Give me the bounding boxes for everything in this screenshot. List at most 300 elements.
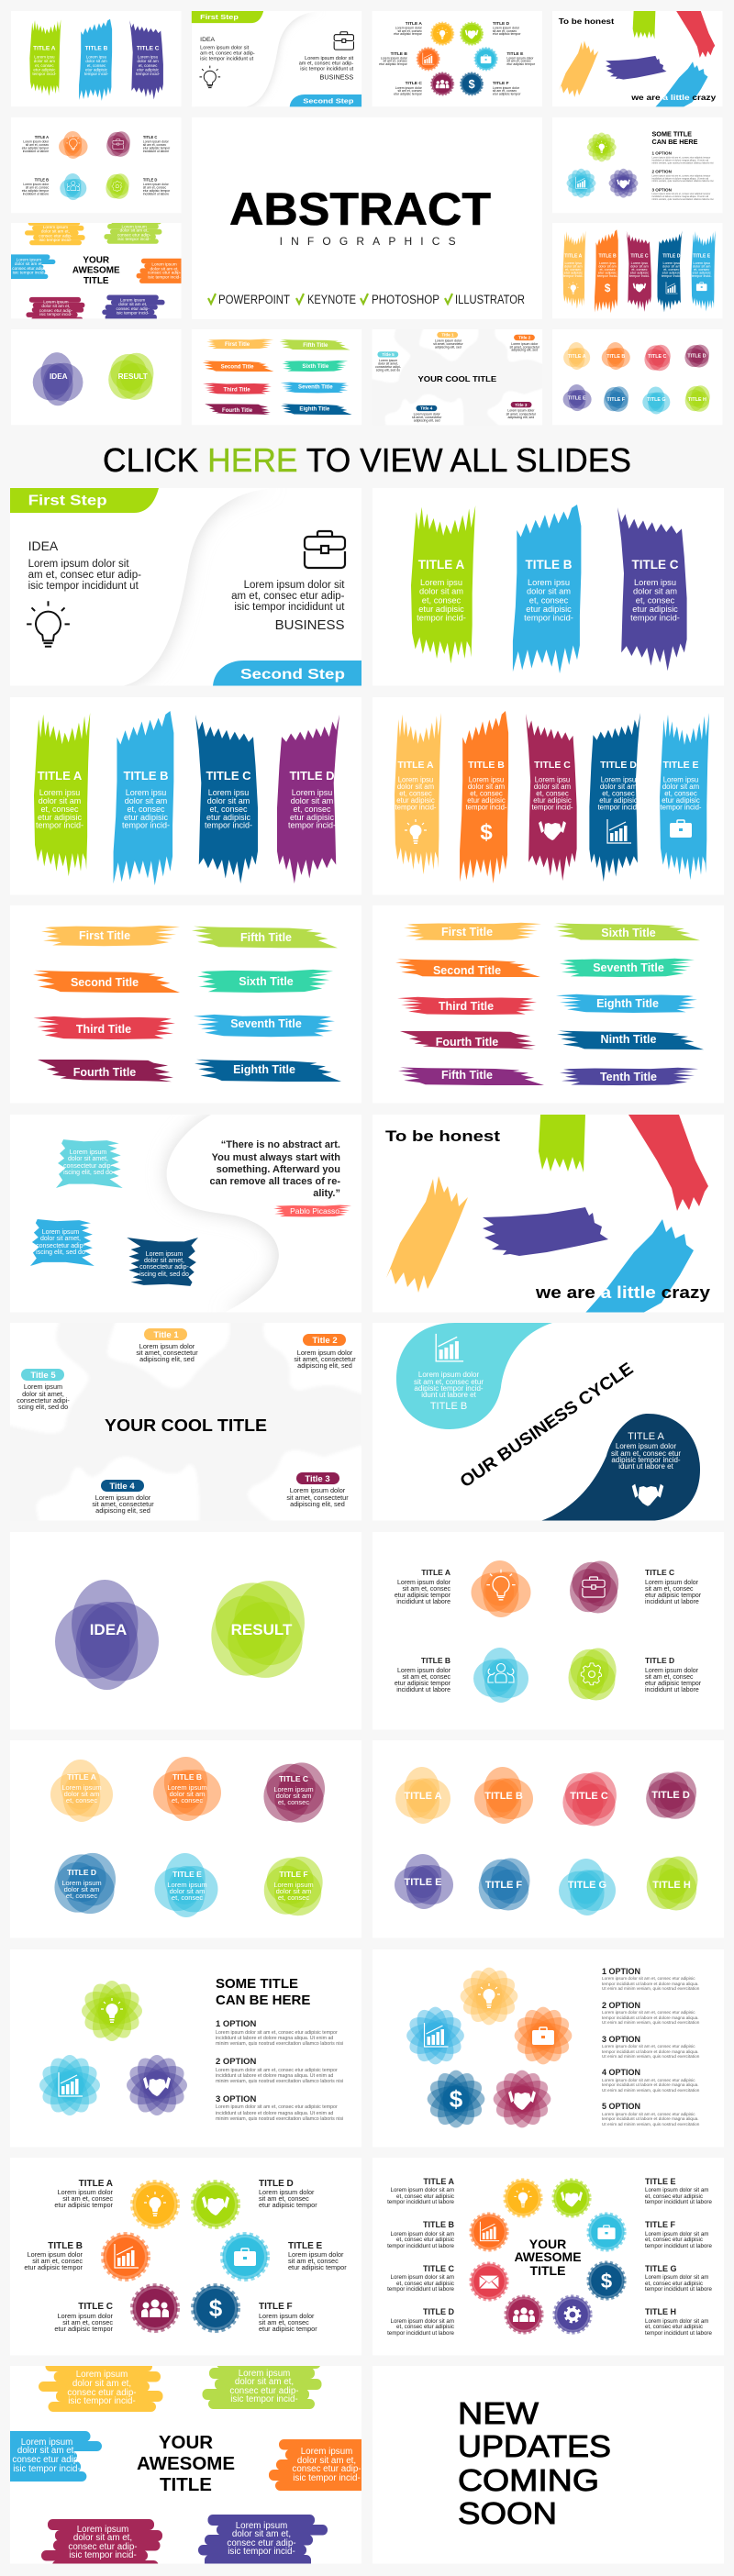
blob B: Lorem ipsum	[167, 1783, 207, 1792]
third title: Third Title	[76, 1023, 131, 1036]
yellow brush	[386, 1176, 468, 1293]
software checklist: PHOTOSHOP	[372, 293, 439, 306]
brush C: et, consec	[209, 805, 248, 814]
brush E: et, consec	[664, 789, 697, 797]
brush A: etur adipisic	[396, 796, 435, 805]
title 5: dolor sit amet,	[22, 1390, 64, 1398]
thumbnail: some title	[552, 117, 722, 213]
panel: four vertical brushes	[34, 711, 339, 885]
badge F	[193, 2285, 317, 2333]
title 1: sit amet, consectetur	[136, 1349, 198, 1357]
brush C: tempor incid-	[531, 803, 573, 811]
green note: consec etur adip-	[229, 2386, 299, 2396]
blob B: et, consec	[172, 1796, 203, 1804]
thumbnail: awesome title	[6, 219, 185, 322]
yellow flower	[458, 1965, 520, 2027]
brush C: tempor incid-	[205, 820, 252, 829]
quote: can remove all traces of re-	[210, 1176, 340, 1187]
brush A: etur adipisic	[38, 813, 83, 822]
badge F: $	[209, 2294, 223, 2322]
first title	[41, 926, 180, 946]
icon: briefcase	[305, 531, 345, 568]
brush A: dolor sit am	[397, 783, 434, 791]
brush C	[195, 715, 258, 883]
brush A: et, consec	[40, 805, 79, 814]
cyan brush note: Lorem ipsum	[70, 1149, 106, 1156]
right labels: Lorem ipsum dolor sit am	[645, 2274, 708, 2281]
cyan drop	[396, 1323, 552, 1429]
brush B: TITLE B	[525, 558, 573, 572]
seventh title	[560, 959, 695, 977]
blob D: Lorem ipsum dolor	[645, 1668, 699, 1674]
first step tab: First Step	[28, 494, 107, 508]
blob C: sit am et, consec	[645, 1586, 694, 1593]
fourth title	[400, 1031, 536, 1049]
badge B	[24, 2234, 149, 2280]
brush C: tempor incid-	[630, 613, 680, 622]
right labels: tempor incididunt ut labore	[645, 2199, 712, 2205]
blob E: TITLE E	[172, 1870, 202, 1879]
brush B: tempor incid-	[122, 820, 170, 829]
second step tab: Second Step	[240, 667, 345, 683]
option 3: Lorem ipsum dolor sit am et, consec etur adipisic tempor	[216, 2104, 338, 2110]
title 2	[294, 1334, 356, 1370]
brush E: etur adipisic	[662, 796, 700, 805]
orange note: consec etur adip-	[292, 2464, 361, 2474]
option 4: Lorem ipsum dolor sit am et, consec etur adipisic	[602, 2078, 695, 2082]
blob C: TITLE C	[645, 1568, 674, 1577]
green brush	[539, 1115, 585, 1172]
eighth title	[556, 994, 697, 1013]
thumbnail: eight titles	[192, 329, 361, 425]
red brush	[628, 1115, 708, 1211]
title 3: sit amet, consectetur	[286, 1493, 349, 1502]
blob B: dolor sit am	[170, 1790, 205, 1798]
panel: eight blobs	[373, 1740, 724, 1938]
dark drop: TITLE A	[628, 1431, 665, 1442]
blue brush note	[30, 1219, 95, 1266]
blob B: TITLE B	[172, 1772, 202, 1782]
right labels: tempor incididunt ut labore	[645, 2330, 712, 2337]
panel: six scalloped badges	[10, 2158, 361, 2356]
blob D: TITLE D	[67, 1868, 96, 1877]
brush C: etur adipisic	[206, 813, 251, 822]
maroon note: Lorem ipsum	[77, 2525, 128, 2535]
option 3: minim veniam, quis nostrud exercitation ullamco laboris nisi	[216, 2116, 343, 2122]
title 2: adipiscing elit, sed	[297, 1361, 352, 1370]
option 1: minim veniam, quis nostrud exercitation ullamco laboris nisi	[216, 2041, 343, 2047]
blob F	[264, 1857, 323, 1915]
blob B	[474, 1767, 533, 1824]
sixth title	[553, 923, 700, 940]
option 2: Lorem ipsum dolor sit am et, consec etur adipisic tempor	[216, 2068, 338, 2073]
right labels: et, consec etur adipisic	[645, 2193, 703, 2200]
badge E: etur adipisic tempor	[288, 2263, 347, 2271]
option 1: Lorem ipsum dolor sit am et, consec etur adipisic tempor	[216, 2030, 338, 2036]
panel: our business cycle	[373, 1323, 724, 1521]
blob B: etur adipisic tempor	[395, 1681, 451, 1687]
icon: light bulb	[27, 601, 70, 647]
fifth title	[192, 927, 338, 948]
brush C	[617, 507, 687, 671]
title 5: Lorem ipsum	[24, 1382, 62, 1391]
blob A: Lorem ipsum dolor	[397, 1580, 451, 1586]
brush A: tempor incid-	[36, 820, 83, 829]
cyan brush note	[56, 1139, 123, 1188]
left labels: et, consec etur adipisic	[396, 2193, 454, 2200]
badge A: Lorem ipsum dolor	[58, 2188, 114, 2196]
title 3	[286, 1472, 349, 1508]
right labels: Lorem ipsum dolor sit am	[645, 2231, 708, 2237]
brush B: et, consec	[127, 805, 165, 814]
blob B	[153, 1757, 221, 1821]
software checklist: ILLUSTRATOR	[455, 293, 525, 306]
brush A	[395, 713, 441, 874]
blob B: sit am et, consec	[402, 1674, 450, 1681]
brush A: tempor incid-	[417, 613, 466, 622]
badge E: Lorem ipsum dolor	[288, 2250, 344, 2259]
thumbnail: five brushes	[552, 223, 722, 318]
thumbnail: three brushes	[11, 11, 181, 106]
badge F: Lorem ipsum dolor	[259, 2312, 315, 2320]
brush C: dolor sit am	[534, 783, 571, 791]
second title	[33, 971, 180, 993]
dark drop: Lorem ipsum dolor	[616, 1442, 676, 1450]
blob B: TITLE B	[421, 1656, 450, 1665]
left labels: TITLE A	[423, 2177, 454, 2186]
option 2: 2 OPTION	[216, 2057, 256, 2067]
title 5: Title 5	[30, 1371, 56, 1381]
thumbnail: eight blobs	[552, 329, 722, 425]
business text block: Lorem ipsum dolor sit	[244, 580, 345, 591]
first title: First Title	[441, 926, 493, 938]
blob A: Lorem ipsum	[61, 1783, 102, 1792]
left labels: et, consec etur adipisic	[396, 2281, 454, 2287]
brush A: et, consec	[399, 789, 432, 797]
blob A: incididunt ut labore	[396, 1599, 450, 1605]
panel: idea and result blobs	[10, 1532, 361, 1730]
brush C: TITLE C	[631, 558, 679, 572]
brush C	[526, 714, 577, 881]
badge E: sit am et, consec	[288, 2257, 339, 2265]
fifth title: Fifth Title	[240, 931, 292, 944]
blob F: et, consec	[278, 1893, 309, 1902]
brush C: Lorem ipsu	[634, 578, 676, 587]
blob D: TITLE D	[645, 1656, 674, 1665]
brush B: et, consec	[470, 789, 503, 797]
blue note	[1, 2431, 102, 2482]
right labels: et, consec etur adipisic	[645, 2281, 703, 2287]
badge B: TITLE B	[48, 2241, 83, 2251]
badge C: Lorem ipsum dolor	[58, 2312, 114, 2320]
text: new updates coming soon: UPDATES	[458, 2429, 611, 2463]
brush B: TITLE B	[468, 760, 505, 771]
blob C: et, consec	[278, 1798, 309, 1806]
brush A: tempor incid-	[395, 803, 437, 811]
result blob	[211, 1581, 305, 1678]
blob F: TITLE F	[279, 1870, 308, 1879]
dark brush note: iscing elit, sed do	[139, 1271, 189, 1278]
center title: TITLE	[530, 2263, 565, 2278]
panel: to be honest	[373, 1115, 724, 1313]
business text block: am et, consec etur adip-	[231, 591, 345, 602]
blob F: Lorem ipsum	[273, 1881, 314, 1889]
option 5: Ut enim ad minim veniam, quis nostrud exercitation	[602, 2122, 700, 2126]
title 4	[92, 1480, 154, 1515]
badge C: TITLE C	[78, 2302, 113, 2312]
text: new updates coming soon: SOON	[458, 2496, 557, 2530]
thumbnail: idea and result	[11, 329, 181, 425]
green note: dolor sit am et,	[235, 2377, 294, 2387]
brush E: dolor sit am	[662, 783, 699, 791]
badge C	[471, 2263, 507, 2300]
badge C: etur adipisic tempor	[54, 2325, 114, 2333]
brush C: TITLE C	[206, 769, 251, 783]
brush B: dolor sit am	[527, 587, 571, 596]
panel: new updates coming soon	[373, 2366, 724, 2563]
blob C	[263, 1762, 325, 1823]
blob A	[50, 1760, 113, 1822]
brush B	[513, 505, 581, 673]
seventh title: Seventh Title	[230, 1017, 302, 1030]
right labels: tempor incididunt ut labore	[645, 2243, 712, 2249]
blob G: TITLE G	[568, 1880, 606, 1891]
cyan brush note: dolor sit amet,	[68, 1156, 108, 1162]
second step tab	[213, 661, 361, 686]
blue note: Lorem ipsum	[21, 2437, 72, 2448]
brush B: tempor incid-	[524, 613, 573, 622]
blob E: dolor sit am	[170, 1887, 205, 1895]
brush B: tempor incid-	[465, 803, 507, 811]
brush C: etur adipisic	[632, 605, 678, 614]
title 4: Title 4	[109, 1482, 135, 1492]
panel: five vertical brushes with icons	[395, 711, 709, 883]
maroon note: dolor sit am et,	[73, 2533, 132, 2543]
blob B: Lorem ipsum dolor	[397, 1668, 451, 1674]
blob H: TITLE H	[652, 1880, 691, 1891]
blob C	[562, 1772, 617, 1826]
thumbnail: to be honest	[552, 11, 722, 107]
option 3: Ut enim ad minim veniam, quis nostrud exercitation	[602, 2054, 700, 2059]
blob D	[54, 1853, 116, 1914]
brush D: tempor incid-	[288, 820, 336, 829]
blob C: TITLE C	[570, 1791, 608, 1802]
brush D: Lorem ipsu	[601, 776, 636, 784]
blue brush note: dolor sit amet,	[40, 1236, 81, 1242]
ninth title: Ninth Title	[601, 1033, 656, 1046]
orange note: Lorem ipsum	[301, 2447, 352, 2457]
thumbnail: first step	[192, 11, 361, 107]
option 5: Lorem ipsum dolor sit am et, consec etur adipisic	[602, 2112, 695, 2116]
second title: Second Title	[433, 964, 501, 977]
brush C: et, consec	[536, 789, 569, 797]
maroon note: consec etur adip-	[68, 2542, 138, 2552]
cyan flower	[37, 2052, 103, 2118]
purple brush	[483, 1207, 608, 1256]
brush D: et, consec	[293, 805, 331, 814]
badge D	[193, 2179, 317, 2227]
first title	[404, 923, 541, 940]
business text block: BUSINESS	[275, 617, 345, 633]
badge E	[222, 2234, 347, 2280]
tenth title	[560, 1068, 698, 1085]
brush D: dolor sit am	[600, 783, 637, 791]
second title	[395, 960, 540, 977]
green note: isic tempor incid-	[230, 2394, 298, 2404]
left labels: tempor incididunt ut labore	[387, 2243, 455, 2249]
maroon flower	[491, 2068, 553, 2130]
green flower	[79, 1978, 145, 2044]
brush A: etur adipisic	[418, 605, 464, 614]
panel: eight horizontal brushes	[33, 925, 341, 1083]
cyan brush note: iscing elit, sed do	[63, 1170, 113, 1176]
option 2: 2 OPTION	[602, 2001, 640, 2010]
blob B: incididunt ut labore	[396, 1687, 450, 1693]
tagline: we are a little crazy	[535, 1283, 710, 1302]
cyan drop: idunt ut labore et	[421, 1391, 477, 1399]
right labels: TITLE E	[645, 2177, 675, 2186]
left labels: Lorem ipsum dolor sit am	[391, 2274, 454, 2281]
brush E: TITLE E	[662, 760, 699, 771]
brush D: TITLE D	[600, 760, 637, 771]
panel: five flowers with options	[373, 1949, 724, 2147]
dark brush note: consectetur adip-	[139, 1264, 190, 1271]
brush C: etur adipisic	[533, 796, 572, 805]
text: new updates coming soon: COMING	[458, 2463, 599, 2497]
fourth title	[38, 1060, 173, 1082]
blob D	[568, 1648, 702, 1701]
left labels: et, consec etur adipisic	[396, 2237, 454, 2243]
panel: Picasso quote	[10, 1115, 368, 1313]
badge F: TITLE F	[259, 2302, 293, 2312]
brush D: TITLE D	[289, 769, 335, 783]
tenth title: Tenth Title	[600, 1071, 657, 1083]
blob A: TITLE A	[67, 1772, 96, 1782]
fourth title: Fourth Title	[436, 1036, 498, 1049]
left labels: Lorem ipsum dolor sit am	[391, 2187, 454, 2193]
brush E	[660, 713, 709, 880]
badge B: etur adipisic tempor	[24, 2263, 83, 2271]
title 4: sit amet, consectetur	[92, 1500, 154, 1508]
brush C: Lorem ipsu	[208, 788, 249, 797]
left labels: TITLE B	[423, 2220, 454, 2229]
text: new updates coming soon	[458, 2396, 611, 2530]
dark drop: idunt ut labore et	[618, 1462, 674, 1471]
blue brush note: consectetur adip-	[36, 1243, 86, 1249]
blue note: dolor sit am et,	[17, 2446, 76, 2456]
third title	[33, 1016, 175, 1039]
option 3: Lorem ipsum dolor sit am et, consec etur adipisic	[602, 2044, 695, 2049]
brush A	[411, 505, 475, 663]
thumbnail: cool title	[370, 328, 545, 427]
option 1: 1 OPTION	[602, 1967, 640, 1976]
option 1: Lorem ipsum dolor sit am et, consec etur adipisic	[602, 1976, 695, 1981]
left labels: Lorem ipsum dolor sit am	[391, 2231, 454, 2237]
blob D: Lorem ipsum	[61, 1879, 102, 1887]
left labels: tempor incididunt ut labore	[387, 2199, 455, 2205]
title 1: adipiscing elit, sed	[139, 1355, 195, 1363]
brush B: TITLE B	[123, 769, 169, 783]
badge D: sit am et, consec	[259, 2194, 309, 2203]
right labels: Lorem ipsum dolor sit am	[645, 2187, 708, 2193]
sixth title: Sixth Title	[239, 975, 294, 988]
panel: three vertical brushes	[411, 505, 687, 673]
brush A: et, consec	[422, 596, 462, 605]
first step tab	[10, 488, 159, 513]
badge F: sit am et, consec	[259, 2318, 309, 2326]
dark brush note	[127, 1238, 198, 1286]
thumbnail: six badges	[373, 11, 542, 106]
option 4: 4 OPTION	[602, 2068, 640, 2077]
panel: eight scalloped badges	[373, 2158, 724, 2356]
option 1: tempor incididunt ut labore et dolore magna aliqua.	[602, 1982, 699, 1986]
blob C	[570, 1560, 702, 1614]
quote author	[273, 1205, 351, 1216]
badge B: Lorem ipsum dolor	[28, 2250, 83, 2259]
blob F: dolor sit am	[276, 1887, 311, 1895]
option 4: Ut enim ad minim veniam, quis nostrud exercitation	[602, 2088, 700, 2093]
blob D: etur adipisic tempor	[645, 1681, 702, 1687]
center cover panel	[192, 117, 542, 319]
option 1: Ut enim ad minim veniam, quis nostrud exercitation	[602, 1986, 700, 1991]
blob D: sit am et, consec	[645, 1674, 694, 1681]
option 3: 3 OPTION	[216, 2094, 256, 2104]
blob A: TITLE A	[404, 1791, 442, 1802]
sixth title: Sixth Title	[601, 927, 656, 939]
blob A: dolor sit am	[64, 1790, 99, 1798]
cyan drop: adipisic tempor incid-	[414, 1384, 484, 1393]
dark blue flower: $	[450, 2085, 463, 2113]
blue flower	[404, 2004, 467, 2067]
idea text block: IDEA	[28, 539, 59, 553]
center title: TITLE	[160, 2474, 212, 2495]
brush A: Lorem ipsu	[420, 578, 462, 587]
orange note	[269, 2439, 371, 2491]
idea blob	[55, 1580, 159, 1690]
blob B: TITLE B	[484, 1791, 523, 1802]
badge H	[554, 2296, 591, 2333]
brush B: dolor sit am	[468, 783, 505, 791]
purple note	[198, 2515, 328, 2568]
title 5: scing elit, sed do	[18, 1403, 68, 1411]
quote author: Pablo Picasso	[290, 1206, 339, 1216]
blob A: etur adipisic tempor	[395, 1593, 451, 1599]
option 1: incididunt ut labore et dolore magna aliqua. Ut enim ad	[216, 2036, 333, 2041]
badge A: etur adipisic tempor	[54, 2201, 114, 2209]
brush B: dolor sit am	[125, 796, 167, 805]
fifth title: Fifth Title	[441, 1069, 493, 1082]
blob C: Lorem ipsum	[273, 1785, 314, 1793]
quote: You must always start with	[212, 1152, 340, 1163]
option 2: incididunt ut labore et dolore magna aliqua. Ut enim ad	[216, 2073, 333, 2079]
dark brush note: dolor sit amet,	[144, 1258, 184, 1264]
option 2: minim veniam, quis nostrud exercitation ullamco laboris nisi	[216, 2079, 343, 2084]
panel: some title with three flowers	[10, 1949, 361, 2147]
purple note: isic tempor incid-	[228, 2547, 295, 2557]
blob G	[559, 1859, 616, 1915]
brush D	[589, 713, 640, 882]
purple note: dolor sit am et,	[232, 2529, 291, 2539]
badge C: sit am et, consec	[62, 2318, 113, 2326]
panel: your awesome title with stacked strokes	[1, 2359, 371, 2570]
left labels: TITLE C	[423, 2264, 454, 2273]
blob D	[646, 1771, 696, 1819]
idea blob: IDEA	[90, 1621, 127, 1638]
blob A: TITLE A	[421, 1568, 450, 1577]
yellow note	[39, 2360, 163, 2412]
option 1: 1 OPTION	[216, 2019, 256, 2029]
title 1	[136, 1328, 198, 1363]
